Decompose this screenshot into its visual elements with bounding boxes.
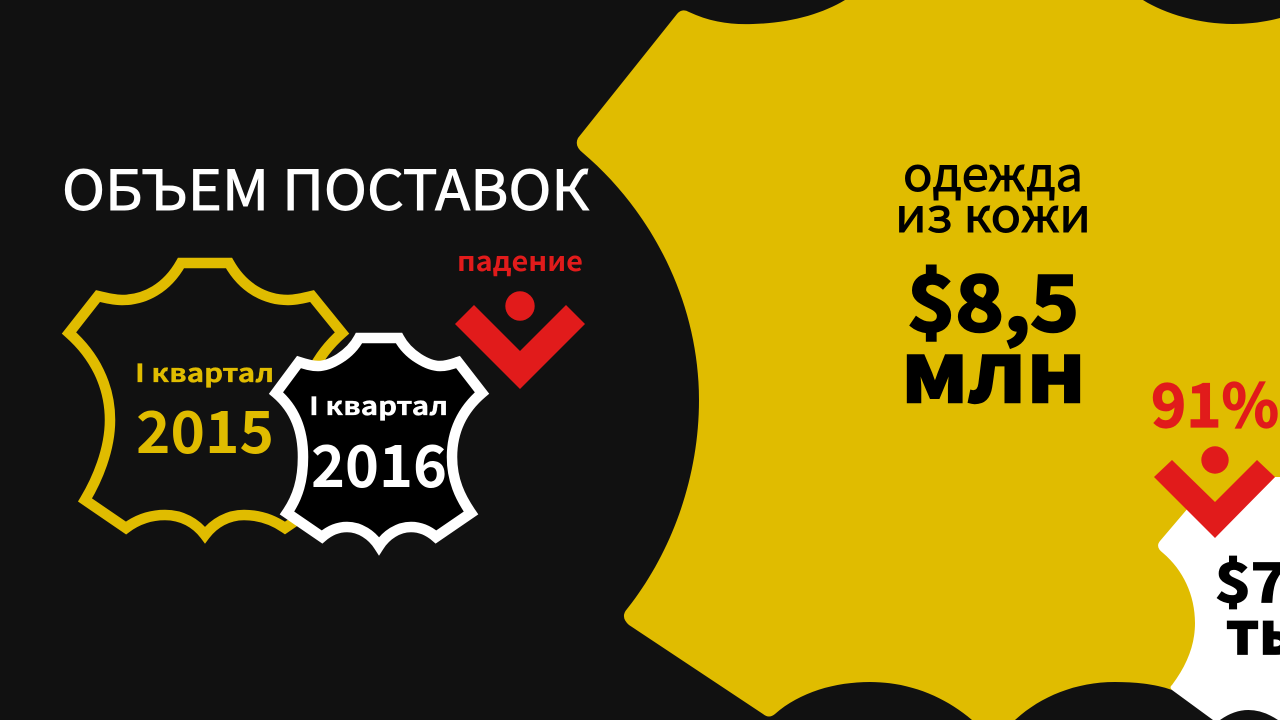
text: Q1 label 2015: I квартал [135,354,274,390]
value: 8.5 million: $8,5 [907,243,1079,354]
panel: small white leather hide [1158,477,1280,720]
panel: large yellow leather hide [577,0,1280,720]
value: 91 percent decline: 91% [1151,358,1279,445]
panel: Q1 2015 hide outline [69,263,342,535]
value: 8.5 million [901,243,1086,426]
value: small amount: $7 [1215,539,1280,618]
value: 2015: 2015 [136,386,274,470]
panel: Q1 2016 hide outline [276,338,482,546]
text: clothing label [895,136,1091,246]
icon: red down chevron with dot, right [1154,446,1275,538]
title: ОБЪЕМ ПОСТАВОК [62,146,589,226]
text: clothing label: из кожи [895,177,1091,246]
value: 2016: 2016 [311,420,447,504]
value: small amount [1215,539,1280,671]
value: 8.5 million: млн [901,306,1086,426]
icon: red down chevron with dot, left [455,291,585,389]
text: Q1 label 2016: I квартал [309,387,448,423]
text: decline label: падение [457,240,583,279]
text: clothing label: одежда [903,136,1083,205]
